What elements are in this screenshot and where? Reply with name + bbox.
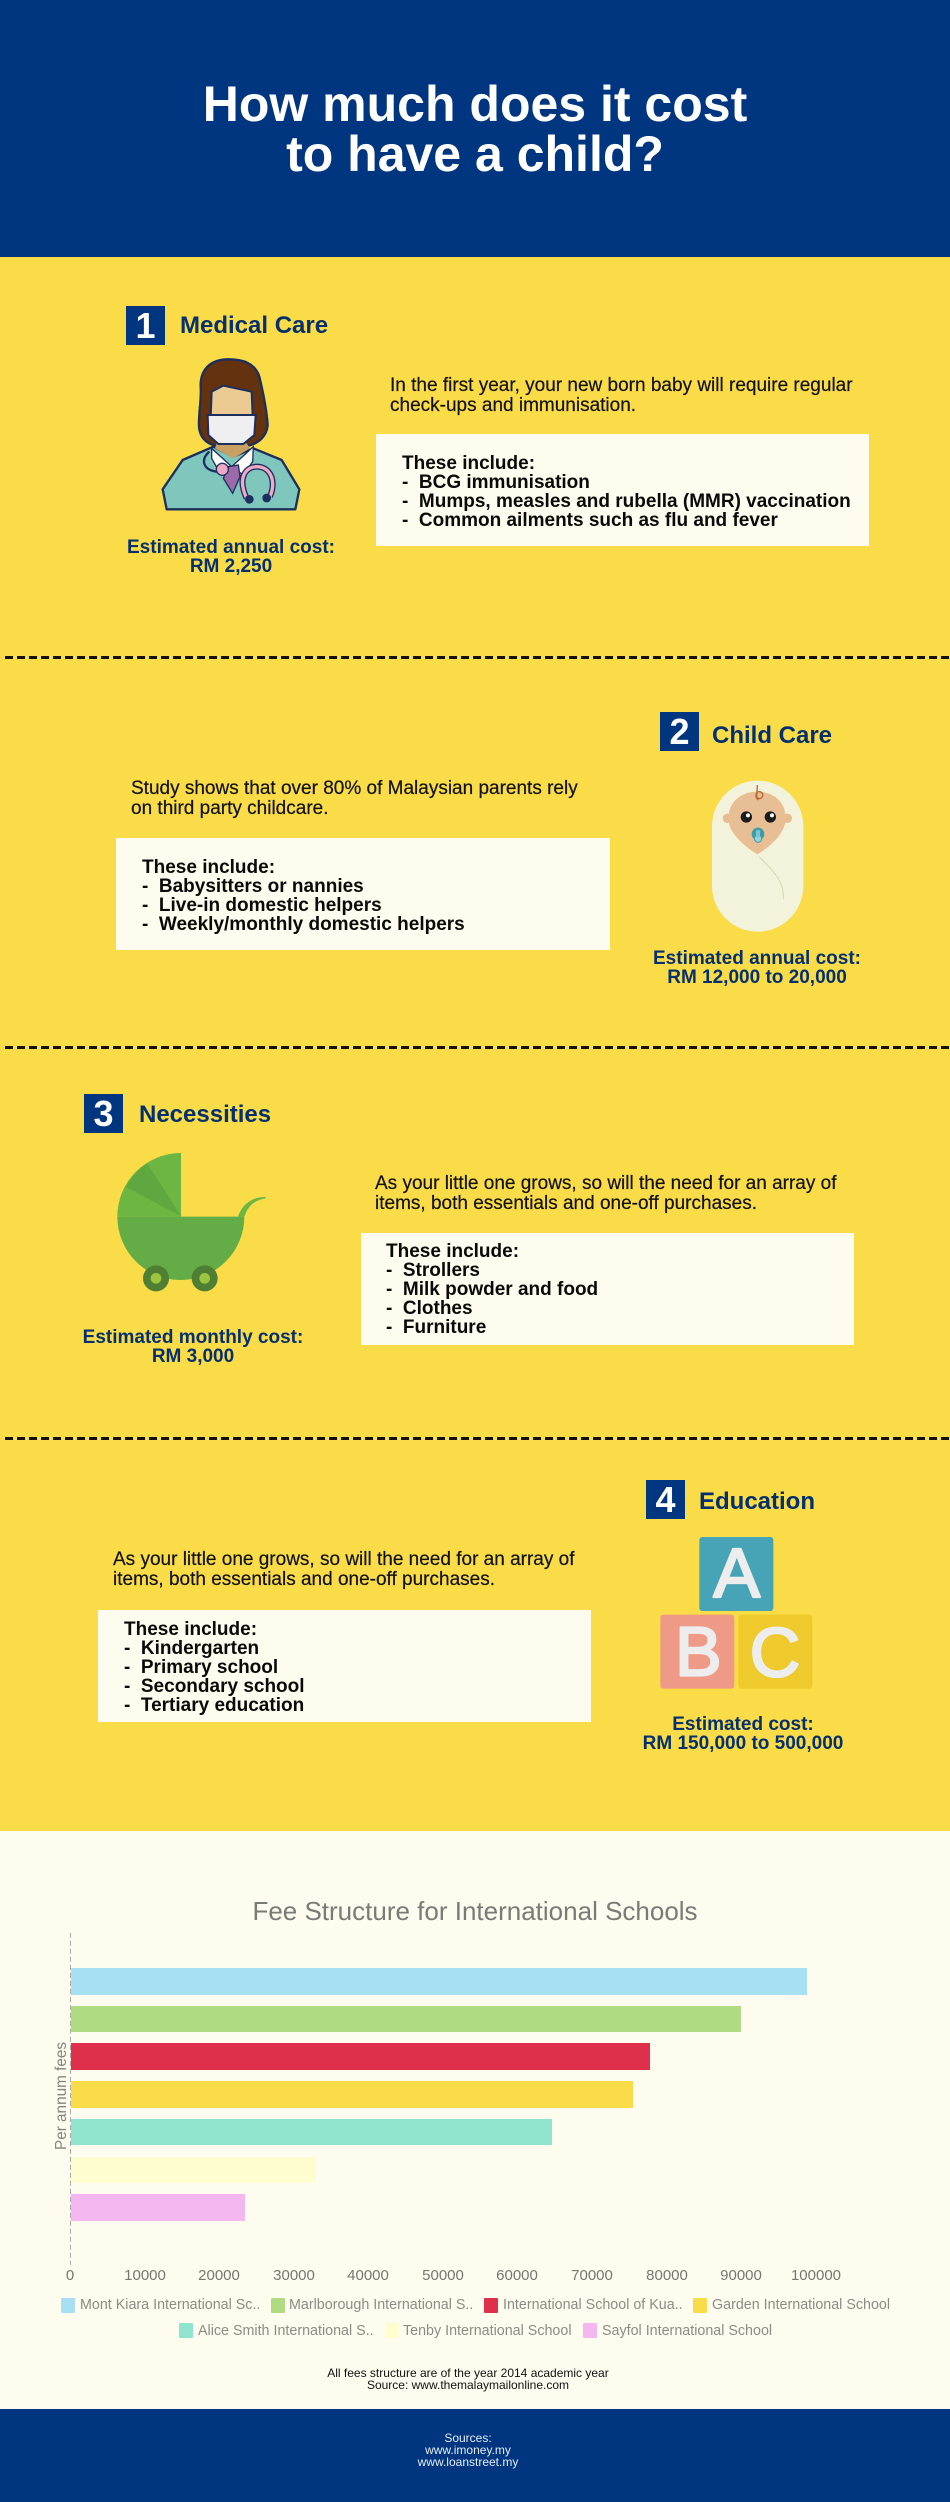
paragraph: necessities	[374, 1173, 837, 1214]
bar: International School of Kuala Lumpur	[71, 2043, 650, 2070]
paragraph: medical care: check-ups and immunisation.	[390, 394, 636, 416]
y axis line	[70, 1933, 71, 2265]
x axis labels: 40000	[347, 2267, 389, 2284]
list: child care: These include: - Babysitters or nannies - Live-in domestic helpers - Weekly/monthly domestic helpers	[142, 856, 465, 934]
cost: child care: Estimated annual cost:	[653, 948, 861, 969]
list box: medical care	[376, 434, 869, 546]
footer sources: Sources:	[444, 2431, 492, 2445]
chart note: Source: www.themalaymailonline.com	[367, 2378, 569, 2392]
x axis labels: 80000	[646, 2267, 688, 2284]
legend: Mont Kiara International Sc..	[80, 2297, 260, 2313]
paragraph: education	[112, 1549, 575, 1590]
icon: ABC blocks	[660, 1534, 812, 1692]
section 3: necessities	[83, 1093, 854, 1366]
bar: Marlborough International School	[71, 2006, 741, 2032]
bar: Sayfol International School	[71, 2194, 245, 2220]
cost: medical care: RM 2,250	[190, 556, 272, 576]
paragraph: medical care: In the first year, your new born baby will require regular	[390, 375, 853, 396]
cost: necessities: RM 3,000	[152, 1346, 234, 1366]
cost: education: RM 150,000 to 500,000	[643, 1732, 843, 1754]
list: medical care: These include: - BCG immunisation - Mumps, measles and rubella (MMR) vaccination - Common ailments such as flu and fever	[402, 452, 851, 530]
badge 3	[84, 1094, 123, 1133]
badge 1: 1	[135, 305, 156, 346]
heading: education: Education	[699, 1488, 815, 1515]
legend: Alice Smith International S..	[198, 2323, 374, 2339]
paragraph: medical care	[390, 375, 853, 416]
cost: medical care	[127, 536, 335, 576]
list: education: These include: - Kindergarten - Primary school - Secondary school - Tertiary education	[124, 1619, 305, 1716]
legend: Sayfol International School	[602, 2323, 772, 2339]
paragraph: child care	[131, 778, 578, 818]
section 2: child care	[116, 711, 861, 988]
chart title: Fee Structure for International Schools	[252, 1896, 698, 1926]
legend: Tenby International School	[403, 2323, 572, 2339]
footer sources	[418, 2431, 518, 2469]
chart panel	[0, 1831, 950, 2409]
cost: necessities	[83, 1326, 303, 1366]
divider 3	[5, 1437, 950, 1440]
footer band	[0, 2409, 950, 2502]
x axis labels: 10000	[124, 2267, 166, 2284]
badge 1	[126, 306, 165, 345]
heading: medical care: Medical Care	[180, 312, 328, 339]
section 1: medical care	[126, 305, 869, 576]
badge 3: 3	[93, 1093, 114, 1134]
icon: doctor	[162, 358, 300, 510]
x axis labels: 60000	[496, 2267, 538, 2284]
paragraph: education: As your little one grows, so will the need for an array of	[113, 1549, 575, 1570]
y axis label: Per annum fees	[53, 2042, 70, 2150]
legend	[61, 2297, 890, 2339]
cost: medical care: Estimated annual cost:	[127, 536, 335, 558]
x axis labels: 0	[66, 2267, 74, 2284]
list: necessities: These include: - Strollers - Milk powder and food - Clothes - Furniture	[386, 1241, 598, 1338]
badge 4: 4	[655, 1479, 676, 1520]
cost: child care: RM 12,000 to 20,000	[667, 967, 847, 988]
title: to have a child?	[286, 126, 664, 182]
cost: necessities: Estimated monthly cost:	[83, 1326, 303, 1348]
chart note	[327, 2366, 609, 2392]
header band	[0, 0, 950, 257]
bar: Tenby International School	[71, 2156, 316, 2183]
heading: child care: Child Care	[712, 722, 832, 749]
icon: baby pram	[117, 1153, 266, 1292]
legend: Garden International School	[712, 2297, 890, 2313]
x axis labels: 20000	[198, 2267, 240, 2284]
chart note: All fees structure are of the year 2014 academic year	[327, 2366, 609, 2380]
x axis labels: 30000	[273, 2267, 315, 2284]
list box: necessities	[361, 1233, 854, 1345]
paragraph: necessities: As your little one grows, so will the need for an array of	[375, 1173, 837, 1194]
icon: ABC blocks: A	[713, 1534, 760, 1612]
legend: International School of Kua..	[503, 2297, 683, 2313]
icon: swaddled baby	[712, 780, 804, 932]
heading: necessities: Necessities	[139, 1101, 271, 1128]
cost: child care	[653, 948, 861, 988]
legend: Marlborough International S..	[289, 2297, 473, 2313]
badge 2: 2	[669, 711, 690, 752]
list box: child care	[116, 838, 610, 950]
icon: ABC blocks: C	[750, 1614, 800, 1692]
paragraph: necessities: items, both essentials and one-off purchases.	[375, 1192, 757, 1214]
section 4: education	[98, 1479, 843, 1754]
footer sources: www.imoney.my	[425, 2443, 511, 2457]
divider 1	[5, 656, 950, 658]
bar: Mont Kiara International School	[71, 1968, 807, 1994]
x axis labels: 90000	[720, 2267, 762, 2284]
paragraph: child care: Study shows that over 80% of Malaysian parents rely	[131, 778, 578, 799]
title	[203, 76, 747, 182]
title: How much does it cost	[203, 76, 747, 132]
bar: Alice Smith International School	[71, 2118, 552, 2145]
bar: Garden International School	[71, 2081, 633, 2108]
x axis labels: 100000	[791, 2267, 841, 2284]
badge 2	[660, 712, 699, 751]
list box: education	[98, 1610, 591, 1722]
cost: education: Estimated cost:	[672, 1714, 814, 1734]
cost: education	[643, 1714, 843, 1754]
paragraph: child care: on third party childcare.	[131, 798, 328, 818]
icon: ABC blocks: B	[675, 1613, 722, 1691]
x axis labels: 70000	[571, 2267, 613, 2284]
footer sources: www.loanstreet.my	[418, 2455, 518, 2469]
x axis labels: 50000	[422, 2267, 464, 2284]
divider 2	[5, 1046, 950, 1049]
badge 4	[646, 1480, 685, 1519]
paragraph: education: items, both essentials and one-off purchases.	[113, 1568, 495, 1590]
